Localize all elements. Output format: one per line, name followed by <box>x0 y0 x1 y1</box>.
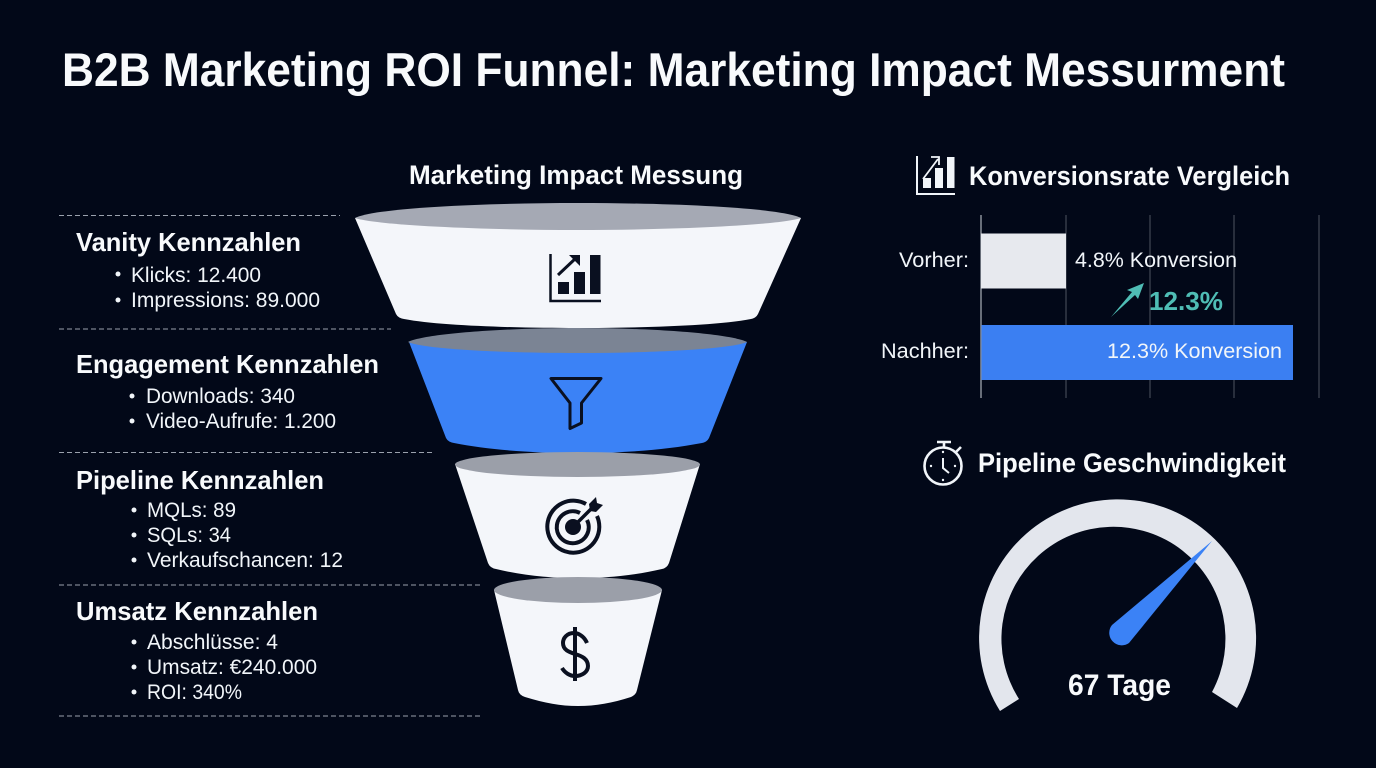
value: before: 4.8% Konversion <box>1075 249 1237 272</box>
gauge needle <box>1109 541 1212 645</box>
chart: before and after bars <box>881 215 1319 398</box>
title: B2B Marketing ROI Funnel: Marketing Impact Messurment <box>62 43 1285 96</box>
panel: engagement metrics <box>76 349 379 433</box>
icon: stopwatch <box>924 442 962 484</box>
panel: pipeline velocity <box>924 442 1286 711</box>
funnel diagram <box>355 203 801 706</box>
icon: bar chart with arrow <box>550 254 601 301</box>
funnel stage 2: engagement <box>408 328 747 453</box>
callout: 12.3%: 12.3% <box>1149 286 1223 316</box>
funnel stage 3: pipeline <box>455 452 700 578</box>
metric: impressions: Impressions: 89.000 <box>131 289 320 312</box>
bar: after <box>982 325 1293 380</box>
heading: engagement: Engagement Kennzahlen <box>76 349 379 379</box>
metric: video views: Video-Aufrufe: 1.200 <box>146 410 336 433</box>
metric: SQLs: SQLs: 34 <box>147 524 231 547</box>
funnel stage 1: vanity <box>355 203 801 328</box>
bar: before <box>981 234 1066 288</box>
funnel stage 4: revenue <box>494 577 662 706</box>
funnel heading: Marketing Impact Messung <box>409 160 743 190</box>
heading: vanity: Vanity Kennzahlen <box>76 227 301 257</box>
metric: downloads: Downloads: 340 <box>146 385 295 408</box>
metric: opportunities: Verkaufschancen: 12 <box>147 549 343 572</box>
metric: clicks: Klicks: 12.400 <box>131 264 261 287</box>
icon: funnel <box>551 378 601 428</box>
metric: ROI: ROI: 340% <box>147 681 242 704</box>
panel: conversion rate comparison <box>881 156 1319 398</box>
label: before: Vorher: <box>899 249 969 272</box>
heading: pipeline velocity: Pipeline Geschwindigkeit <box>978 448 1286 478</box>
gauge <box>979 499 1256 711</box>
gauge value: 67 Tage <box>1068 669 1171 702</box>
panel: vanity metrics <box>76 227 320 312</box>
metric: MQLs: MQLs: 89 <box>147 499 236 522</box>
panel: revenue metrics <box>76 596 318 704</box>
heading: conversion comparison: Konversionsrate Vergleich <box>969 161 1290 191</box>
arrow: increase <box>1111 283 1144 317</box>
metric: revenue: Umsatz: €240.000 <box>147 656 317 679</box>
panel: pipeline metrics <box>76 465 343 572</box>
icon: dollar sign <box>562 627 588 681</box>
heading: pipeline: Pipeline Kennzahlen <box>76 465 324 495</box>
value: after: 12.3% Konversion <box>1107 340 1282 363</box>
icon: chart header <box>917 156 955 194</box>
gauge arc <box>979 499 1256 711</box>
heading: revenue: Umsatz Kennzahlen <box>76 596 318 626</box>
metric: deals: Abschlüsse: 4 <box>147 631 278 654</box>
label: after: Nachher: <box>881 340 969 363</box>
icon: target with arrow <box>547 497 603 553</box>
